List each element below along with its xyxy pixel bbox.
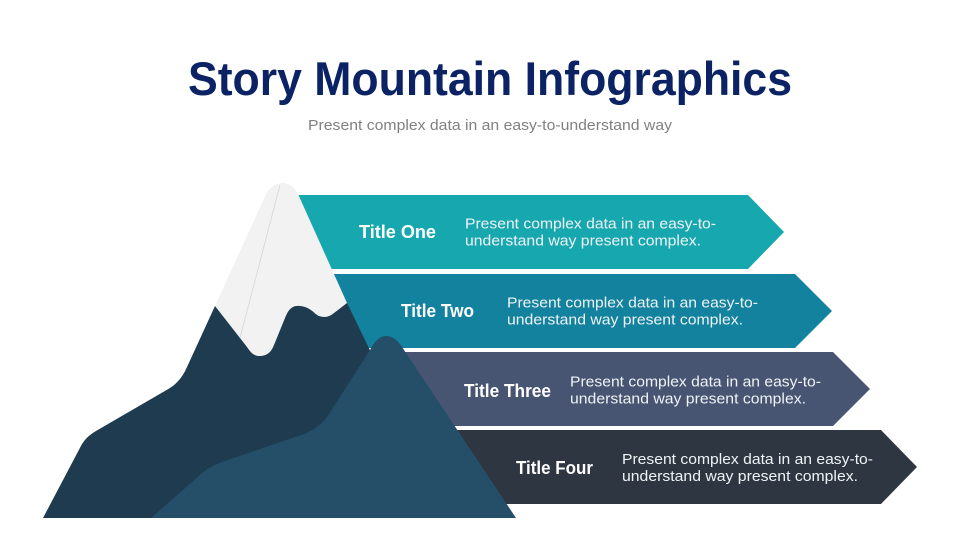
title: Story Mountain Infographics (188, 52, 792, 105)
front mountain (151, 336, 516, 518)
heading: title one: Title One (359, 221, 436, 242)
snow cap (215, 183, 347, 356)
text block: title three description: Present complex data in an easy-to- (570, 374, 821, 390)
icon: story mountain (43, 183, 516, 518)
heading: title two: Title Two (401, 300, 474, 321)
text block: title three description: understand way present complex. (570, 390, 806, 408)
text block: title one description: understand way present complex. (465, 232, 701, 250)
panel: title two arrow (325, 274, 832, 348)
subtitle: Present complex data in an easy-to-understand way (308, 117, 673, 134)
panel: title three arrow (395, 352, 870, 426)
text block: title one description: Present complex data in an easy-to- (465, 216, 716, 232)
heading: title three: Title Three (464, 380, 551, 401)
text block: title two description: understand way present complex. (507, 312, 743, 328)
text block: title two description: Present complex data in an easy-to- (507, 294, 758, 312)
panel: title four arrow (445, 430, 917, 504)
panel: title one arrow (290, 195, 784, 269)
heading: title four: Title Four (516, 457, 593, 478)
back mountain (43, 303, 385, 518)
text block: title four description: understand way present complex. (622, 468, 858, 485)
snow crease line (240, 185, 280, 338)
text block: title four description: Present complex data in an easy-to- (622, 451, 873, 468)
